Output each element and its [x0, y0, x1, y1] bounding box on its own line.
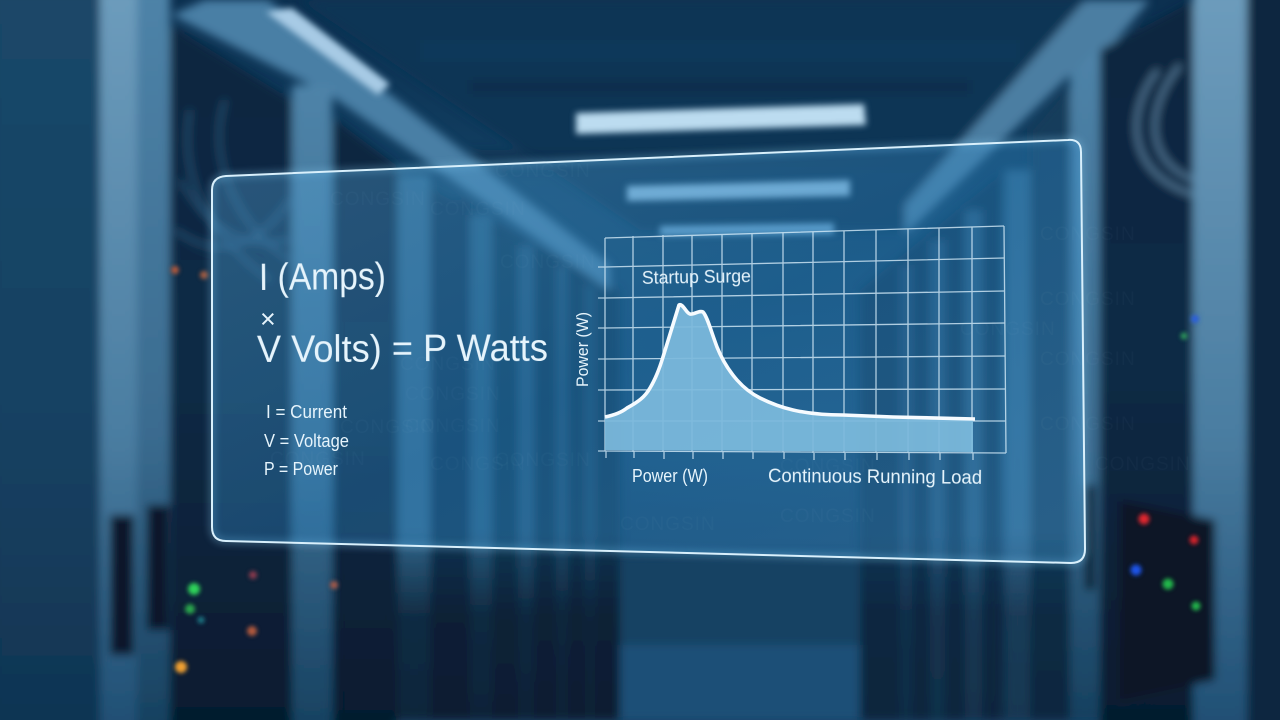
faint watermark text: CONGSIN	[500, 252, 596, 273]
left columns	[100, 0, 137, 720]
faint watermark text: CONGSIN	[330, 189, 426, 210]
formula: V Volts) = P Watts: V Volts) = P Watts	[257, 327, 548, 371]
faint watermark text: CONGSIN	[960, 319, 1056, 340]
status LEDs	[171, 266, 1200, 673]
end wall and floor	[620, 555, 860, 645]
panel: glass formula and chart card	[212, 140, 1191, 563]
label: Startup Surge: Startup Surge	[642, 266, 751, 288]
faint watermark text	[270, 161, 1191, 535]
faint watermark text: CONGSIN	[1095, 454, 1191, 475]
faint watermark text: CONGSIN	[1040, 289, 1136, 310]
faint watermark text: CONGSIN	[1040, 349, 1136, 370]
faint watermark text: CONGSIN	[495, 161, 591, 182]
faint watermark text: CONGSIN	[1040, 224, 1136, 245]
area under the curve	[605, 305, 973, 452]
x axis label: Continuous Running Load: Continuous Running Load	[768, 466, 982, 489]
faint watermark text: CONGSIN	[430, 199, 526, 220]
faint watermark text: CONGSIN	[1040, 414, 1136, 435]
faint watermark text: CONGSIN	[400, 354, 496, 375]
faint watermark text: CONGSIN	[620, 514, 716, 535]
right beam	[905, 0, 1150, 235]
legend: variable definitions	[264, 402, 349, 479]
bottom fade of corridor	[395, 530, 620, 720]
x axis label: Power (W): Power (W)	[632, 466, 708, 486]
left panel	[0, 0, 102, 720]
legend: variable definitions: I = Current	[266, 402, 347, 422]
grid lines	[598, 226, 1006, 460]
right corridor perspective columns	[860, 175, 1000, 720]
ceiling lights	[266, 8, 390, 95]
right rack and columns	[1100, 0, 1195, 720]
left rack 2	[333, 118, 396, 720]
legend: variable definitions: V = Voltage	[264, 431, 349, 451]
faint watermark text: CONGSIN	[780, 506, 876, 527]
left rack 1	[170, 25, 292, 720]
y axis label: Power (W)	[573, 312, 592, 387]
curve line: surge then continuous load	[605, 305, 975, 419]
formula: I (Amps): I (Amps)	[259, 256, 386, 299]
cable bundles	[1137, 65, 1195, 195]
left corridor perspective columns	[395, 170, 620, 720]
faint watermark text: CONGSIN	[270, 449, 366, 470]
formula: multiply sign: ×	[260, 304, 276, 334]
faint watermark text: CONGSIN	[780, 456, 876, 477]
left beam	[172, 0, 610, 290]
faint watermark text: CONGSIN	[405, 416, 501, 437]
faint watermark text: CONGSIN	[495, 450, 591, 471]
rack hardware blocks	[110, 515, 134, 655]
faint watermark text: CONGSIN	[340, 417, 436, 438]
faint watermark text: CONGSIN	[405, 384, 501, 405]
faint watermark text: CONGSIN	[430, 454, 526, 475]
chart: power over time	[573, 226, 1006, 489]
ceiling bands	[300, 0, 1090, 230]
legend: variable definitions: P = Power	[264, 459, 338, 479]
